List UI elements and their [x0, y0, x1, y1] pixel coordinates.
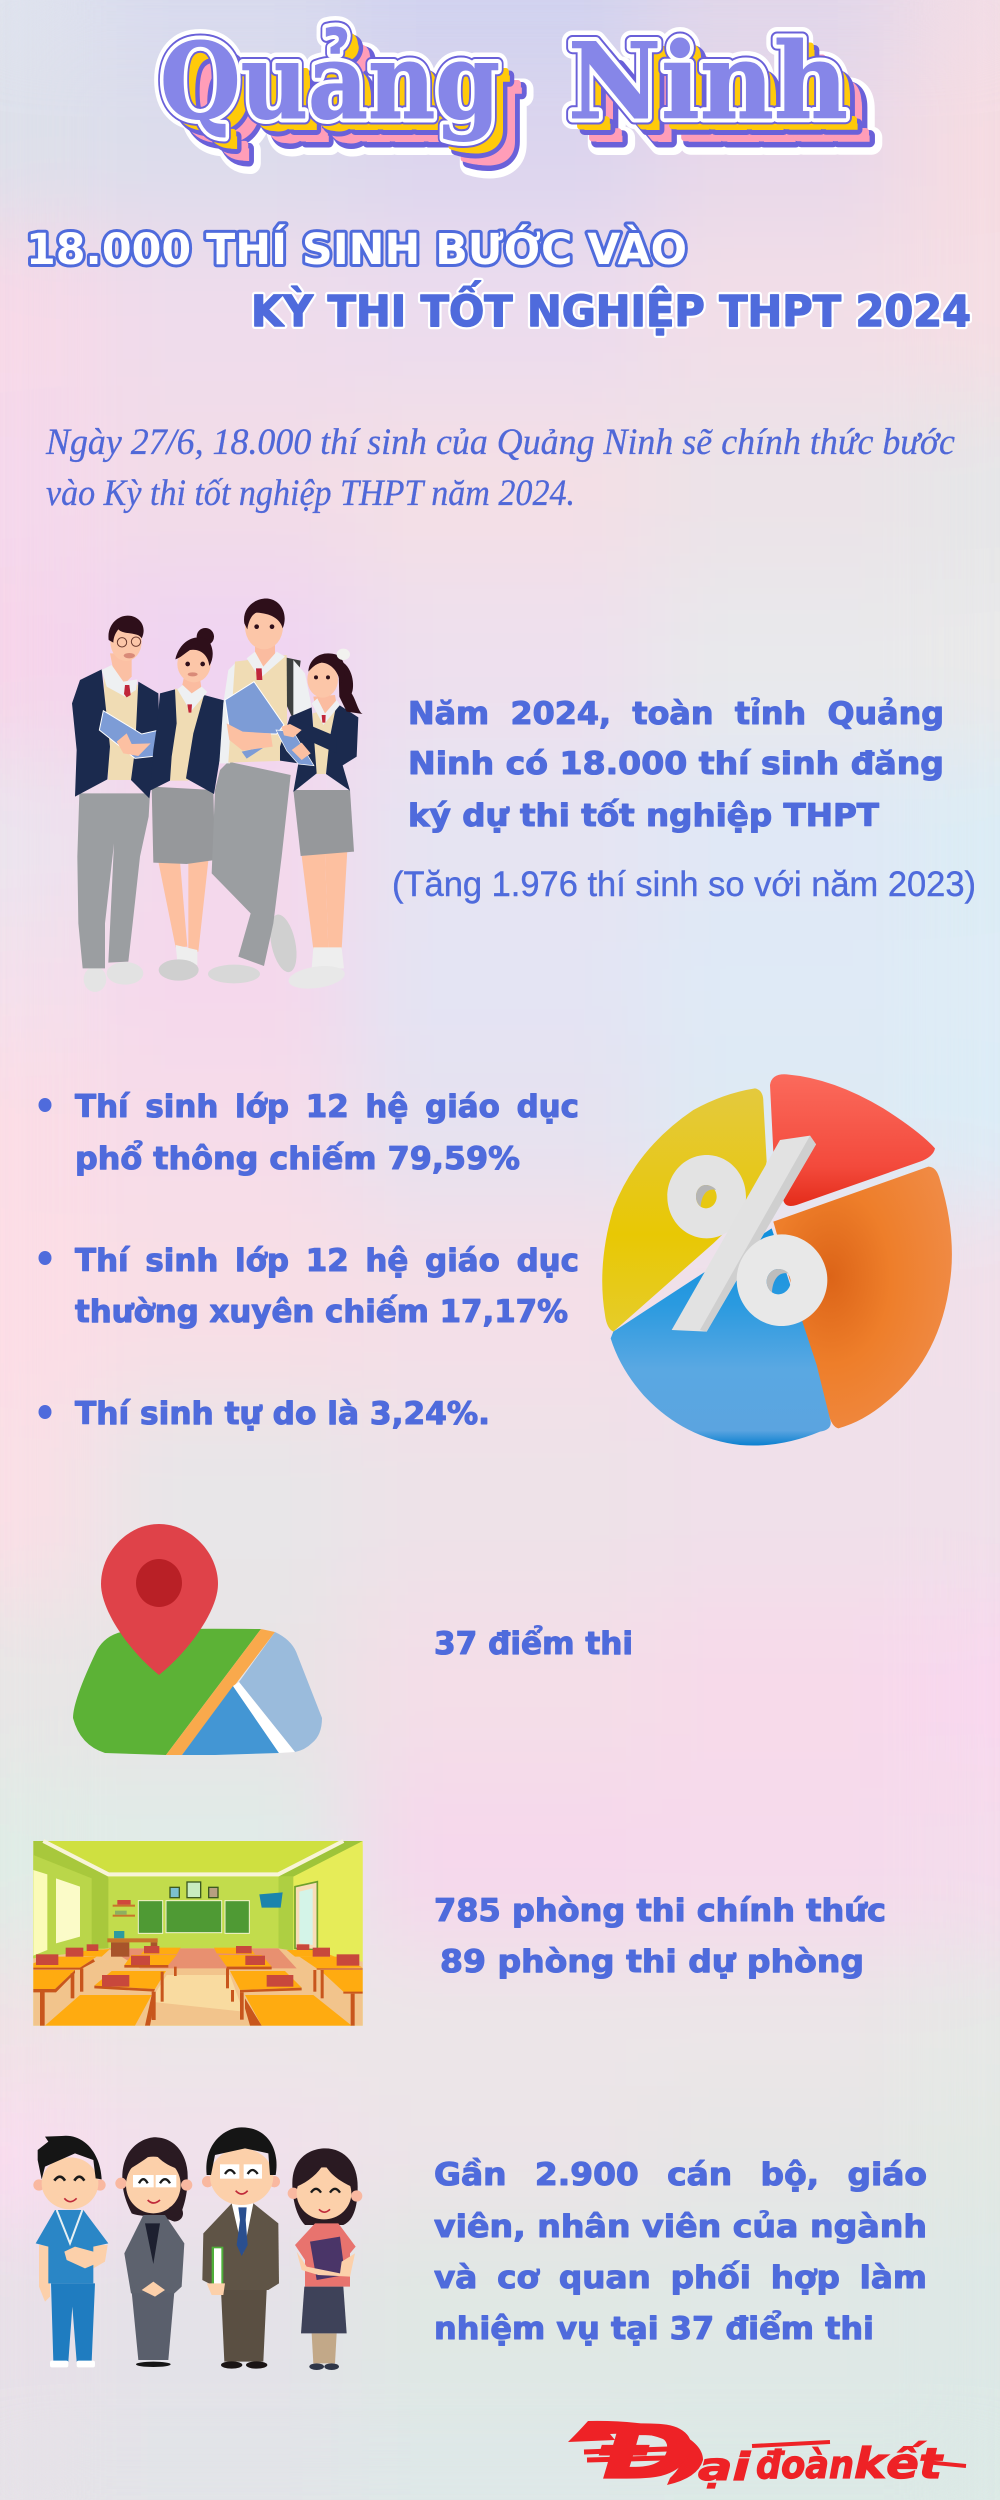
staff: man in brown suit — [202, 2127, 280, 2369]
bullet: continuing education share: thường xuyên chiếm 17,17% — [75, 1294, 568, 1330]
title: Quảng Ninh: Quảng — [160, 19, 500, 143]
bullet list: candidate shares — [38, 1089, 579, 1432]
intro paragraph — [45, 422, 956, 514]
staff: man in blue scrubs — [33, 2136, 108, 2367]
text: staff count: Gần 2.900 cán bộ, giáo — [434, 2157, 927, 2193]
text: registered candidates: Ninh có 18.000 thí sinh đăng — [408, 746, 944, 782]
rear and side desks — [33, 1948, 363, 2026]
title: Quảng Ninh: Ninh — [568, 19, 848, 143]
title: Quảng Ninh: Ninh — [594, 45, 874, 169]
intro paragraph: vào Kỳ thi tốt nghiệp THPT năm 2024. — [46, 473, 575, 514]
heading line 2: KỲ THI TỐT NGHIỆP THPT 2024 — [251, 280, 971, 337]
text: exam rooms: 89 phòng thi dự phòng — [440, 1944, 864, 1980]
bullet: general education share: phổ thông chiếm 79,59% — [75, 1141, 520, 1177]
text: staff count — [434, 2157, 927, 2347]
title: Quảng Ninh: Ninh — [580, 31, 860, 155]
title: Quảng Ninh — [160, 19, 874, 169]
logo: Đại đoàn kết: ại — [698, 2445, 751, 2489]
text: registered candidates: Năm 2024, toàn tỉnh Quảng — [408, 696, 944, 732]
staff: woman in coral shirt — [288, 2148, 362, 2370]
title: Quảng Ninh: Quảng — [160, 19, 500, 143]
intro paragraph: Ngày 27/6, 18.000 thí sinh của Quảng Ninh sẽ chính thức bước — [45, 422, 956, 463]
title: Quảng Ninh: Quảng — [180, 39, 520, 163]
text: staff count: viên, nhân viên của ngành — [434, 2209, 927, 2245]
heading line 1: 18.000 THÍ SINH BƯỚC VÀO — [26, 224, 687, 275]
bullet: continuing education share: Thí sinh lớp 12 hệ giáo dục — [75, 1243, 579, 1279]
icon: 3D pie chart with percent sign — [602, 1074, 952, 1446]
icon: map with location pin — [73, 1524, 322, 1755]
title: Quảng Ninh: Quảng — [160, 19, 500, 143]
staff: woman in grey suit — [115, 2137, 192, 2367]
title: Quảng Ninh: Ninh — [588, 39, 868, 163]
heading line 2: KỲ THI TỐT NGHIỆP THPT 2024 — [251, 280, 971, 337]
logo: Đại đoàn kết: kết — [854, 2439, 944, 2488]
icon: red pin — [101, 1524, 218, 1675]
title: Quảng Ninh: Ninh — [568, 19, 848, 143]
bullet: general education share: Thí sinh lớp 12 hệ giáo dục — [75, 1089, 579, 1125]
text: staff count: và cơ quan phối hợp làm — [434, 2260, 927, 2296]
title: Quảng Ninh: Ninh — [568, 19, 848, 143]
student: boy with glasses — [72, 616, 190, 992]
title: Quảng Ninh: Ninh — [592, 43, 872, 167]
title: Quảng Ninh: Quảng — [172, 31, 512, 155]
text: registered candidates: ký dự thi tốt nghiệp THPT — [408, 798, 879, 834]
text: registered candidates — [408, 696, 944, 834]
text: exam rooms — [434, 1893, 886, 1980]
text: exam rooms: 785 phòng thi chính thức — [434, 1893, 886, 1929]
illustration: classroom — [33, 1841, 363, 2026]
logo: Đại đoàn kết: Đ — [598, 2410, 695, 2496]
bullet: continuing education share — [38, 1243, 579, 1330]
student: girl with ponytail — [276, 649, 363, 992]
illustration: four exam staff — [33, 2127, 362, 2370]
title: Quảng Ninh: Quảng — [184, 43, 524, 167]
bullet: general education share — [38, 1089, 579, 1177]
title: Quảng Ninh: Quảng — [168, 27, 508, 151]
bullet: independent candidates share: Thí sinh tự do là 3,24%. — [75, 1396, 490, 1432]
illustration: four students with books — [72, 599, 363, 992]
title: Quảng Ninh: Ninh — [576, 27, 856, 151]
text: exam sites: 37 điểm thi — [434, 1626, 633, 1662]
logo: Đại đoàn kết: đoàn — [756, 2443, 854, 2487]
title: Quảng Ninh: Ninh — [568, 19, 848, 143]
student: girl with hair bun — [150, 628, 226, 981]
title: Quảng Ninh: Quảng — [186, 45, 526, 169]
logo: Đại đoàn kết — [568, 2410, 966, 2496]
text: staff count: nhiệm vụ tại 37 điểm thi — [434, 2311, 874, 2347]
student: tall boy with backpack — [208, 599, 312, 983]
title: Quảng Ninh: Quảng — [160, 19, 500, 143]
text: year-on-year increase: (Tăng 1.976 thí sinh so với năm 2023) — [392, 865, 976, 904]
